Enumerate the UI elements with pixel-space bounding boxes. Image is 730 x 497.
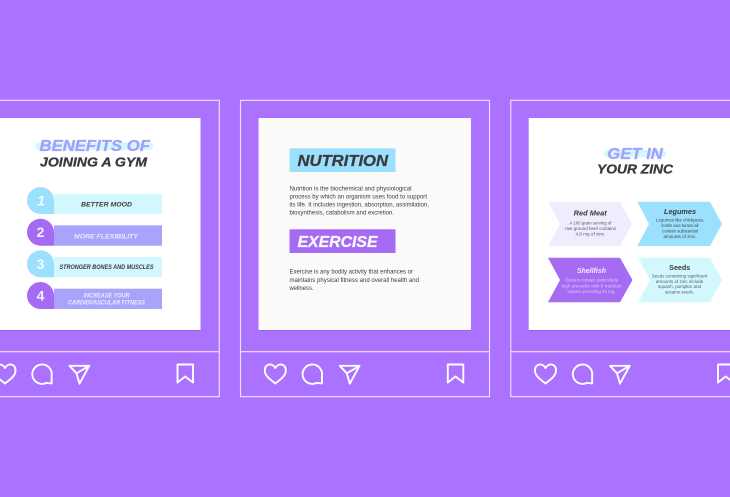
chevron: legumes: amounts of zinc.	[664, 234, 696, 239]
chevron: red meat: 4.8 mg of zinc.	[576, 232, 606, 237]
text block: nutrition definition: Nutrition is the biochemical and physiological	[290, 186, 412, 192]
chevron: shellfish: Shellfish	[577, 268, 606, 275]
frame outline	[0, 100, 219, 397]
list item 4: CARDIOVASCULAR FITNESS	[68, 300, 145, 306]
chevron: seeds: squash, pumpkin and	[658, 284, 702, 289]
text block: nutrition definition: process by which an organism uses food to support	[290, 194, 427, 200]
chevron: legumes: lentils and beans all	[662, 223, 699, 228]
list item 1: BETTER MOOD	[81, 202, 132, 208]
text block: exercise definition: maintains physical fitness and overall health and	[290, 278, 419, 284]
text block: exercise definition	[289, 270, 419, 292]
chevron: seeds: Seeds	[669, 265, 690, 272]
chevron: shellfish	[548, 258, 632, 302]
heading: benefits of joining a gym: JOINING A GYM	[40, 155, 148, 170]
list item 4: INCREASE YOUR	[84, 293, 130, 299]
chevron: red meat	[548, 202, 632, 246]
chevron: seeds	[638, 258, 722, 302]
list item 1	[27, 187, 162, 214]
heading: exercise	[290, 229, 396, 253]
list item 2: MORE FLEXIBILITY	[74, 234, 139, 240]
text block: exercise definition: Exercise is any bodily activity that enhances or	[290, 270, 413, 276]
chevron: shellfish: high amounts with 6 medium	[562, 283, 622, 288]
heading: get in your zinc: YOUR ZINC	[597, 162, 674, 176]
text block: nutrition definition: biosynthesis, catabolism and excretion.	[290, 211, 394, 217]
heading: get in your zinc: GET IN	[607, 146, 663, 163]
panel: definitions card	[258, 118, 471, 331]
chevron: legumes: contain substantial	[662, 228, 698, 233]
chevron: red meat: A 100 gram serving of	[570, 220, 612, 225]
heading: benefits of joining a gym	[35, 138, 153, 170]
text block: nutrition definition: its life. It includes ingestion, absorption, assimilation,	[290, 202, 429, 208]
heading: nutrition: NUTRITION	[298, 153, 388, 170]
chevron: shellfish: oysters providing 32 mg.	[568, 289, 616, 294]
frame outline	[511, 100, 730, 397]
text block: nutrition definition	[290, 186, 429, 217]
text block: exercise definition: wellness.	[289, 286, 314, 292]
list item 4: 4	[37, 288, 45, 304]
list item 4	[27, 282, 162, 309]
chevron: legumes: Legumes like chickpeas,	[656, 217, 704, 222]
chevron: seeds: sesame seeds.	[665, 290, 694, 295]
heading: exercise: EXERCISE	[298, 234, 379, 251]
chevron: seeds: Seeds containing significant	[652, 274, 708, 278]
panel: benefits card	[0, 118, 200, 331]
action icons: like, comment, share, save	[0, 364, 193, 384]
heading: get in your zinc	[597, 146, 674, 176]
list item 1: 1	[37, 192, 45, 208]
heading: benefits of joining a gym: BENEFITS OF	[40, 138, 151, 155]
frame outline	[240, 100, 490, 397]
chevron: legumes: Legumes	[664, 209, 696, 216]
action icons: like, comment, share, save	[535, 364, 730, 384]
post frame: nutrition and exercise	[240, 100, 490, 397]
post frame: benefits of joining a gym	[0, 100, 219, 397]
chevron: seeds: amounts of zinc include	[656, 279, 704, 284]
panel: zinc card	[529, 118, 730, 331]
list item 3: 3	[37, 256, 45, 272]
list item 2: 2	[37, 224, 45, 240]
chevron: red meat: Red Meat	[574, 210, 607, 218]
chevron: red meat: raw ground beef contains	[565, 226, 617, 231]
list item 3: STRONGER BONES AND MUSCLES	[60, 265, 154, 271]
heading: nutrition	[290, 148, 396, 172]
chevron: legumes	[637, 202, 722, 246]
list item 2	[27, 219, 162, 246]
list item 3	[27, 250, 162, 277]
post frame: get in your zinc	[511, 100, 730, 397]
action icons: like, comment, share, save	[265, 364, 463, 384]
chevron: shellfish: Oysters contain particularly	[565, 278, 619, 283]
